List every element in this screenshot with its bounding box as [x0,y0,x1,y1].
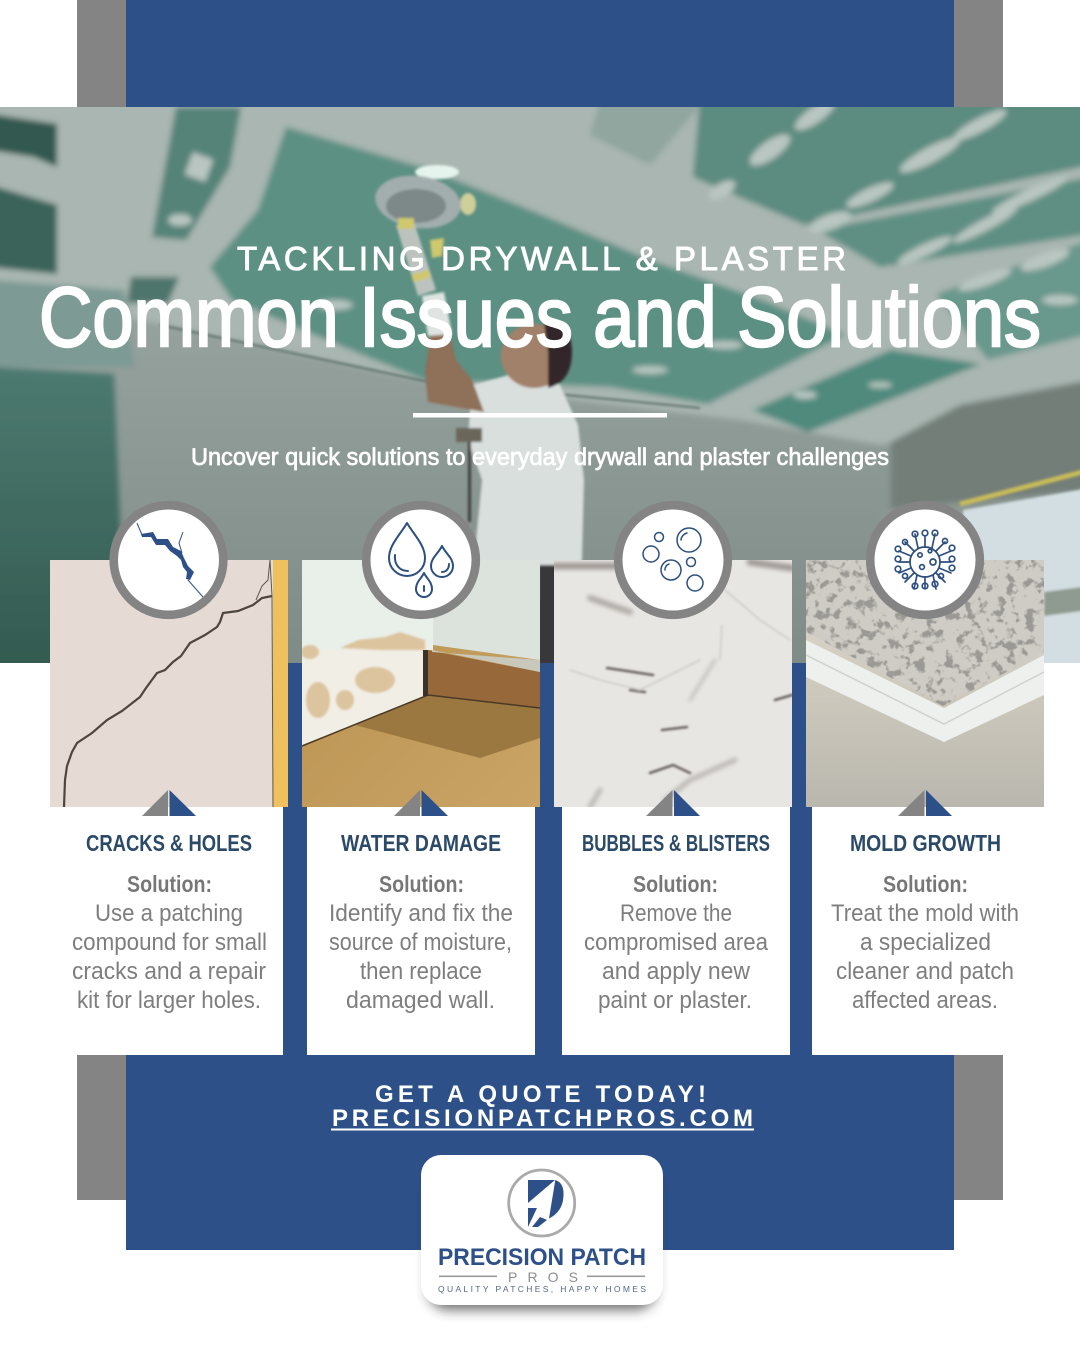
card: bubbles and blisters [562,505,790,1055]
photo: mold on ceiling corner [806,560,1044,807]
solution text: Remove the [620,900,732,927]
solution text: cleaner and patch [836,958,1014,985]
solution text [584,871,769,1014]
pointer [394,790,448,816]
title divider [413,413,667,418]
card: cracks and holes [50,505,283,1055]
worker [468,372,584,600]
title eyebrow: TACKLING DRYWALL & PLASTER [237,240,846,277]
logo name: PRECISION PATCH [438,1244,646,1271]
call to action: PRECISIONPATCHPROS.COM [332,1105,753,1132]
solution text [329,871,513,1014]
solution text: damaged wall. [346,987,495,1014]
top blue band [126,0,954,107]
call to action [331,1081,754,1132]
solution text: compromised area [584,929,769,956]
lower gray band [77,1055,1003,1200]
photo: peeling paint [554,560,792,807]
call to action: GET A QUOTE TODAY! [375,1081,706,1108]
photo: water damaged baseboard [302,560,540,807]
pointer [646,790,700,816]
card: mold growth [812,505,1044,1055]
solution text: compound for small [72,929,267,956]
card: water damage [307,505,535,1055]
solution text: Treat the mold with [831,900,1019,927]
solution text: Solution: [883,871,968,897]
logo rules [439,1276,645,1277]
solution text: Solution: [127,871,212,897]
pointer [142,790,196,816]
solution text: and apply new [602,958,751,985]
lower blue panel [126,663,954,1250]
subtitle: Uncover quick solutions to everyday drywall and plaster challenges [191,444,889,471]
icon: bubbles [618,505,728,615]
heading: CRACKS & HOLES [86,830,252,856]
logo sub name: PROS [508,1269,578,1285]
top gray band [77,0,1003,107]
solution text: source of moisture, [329,929,512,956]
photo: wall crack [50,560,288,807]
solution text: Identify and fix the [329,900,513,927]
heading: WATER DAMAGE [341,830,501,856]
solution text: cracks and a repair [72,958,266,985]
heading: BUBBLES & BLISTERS [582,830,770,856]
icon: water drops [366,505,476,615]
heading: MOLD GROWTH [850,830,1001,856]
solution text: Use a patching [95,900,243,927]
hero photo: worker sanding ceiling [0,107,1080,663]
icon: mold spore [870,505,980,615]
solution text: kit for larger holes. [77,987,261,1014]
logo mark [509,1170,575,1236]
logo tagline: QUALITY PATCHES, HAPPY HOMES [438,1284,646,1294]
solution text: a specialized [860,929,991,956]
solution text [831,871,1019,1014]
logo card [421,1155,663,1310]
solution text [72,871,267,1014]
solution text: paint or plaster. [598,987,752,1014]
window [160,165,1080,673]
icon: crack [114,505,223,615]
pointer [898,790,952,816]
solution text: Solution: [379,871,464,897]
solution text: affected areas. [852,987,998,1014]
solution text: then replace [360,958,482,985]
solution text: Solution: [633,871,718,897]
